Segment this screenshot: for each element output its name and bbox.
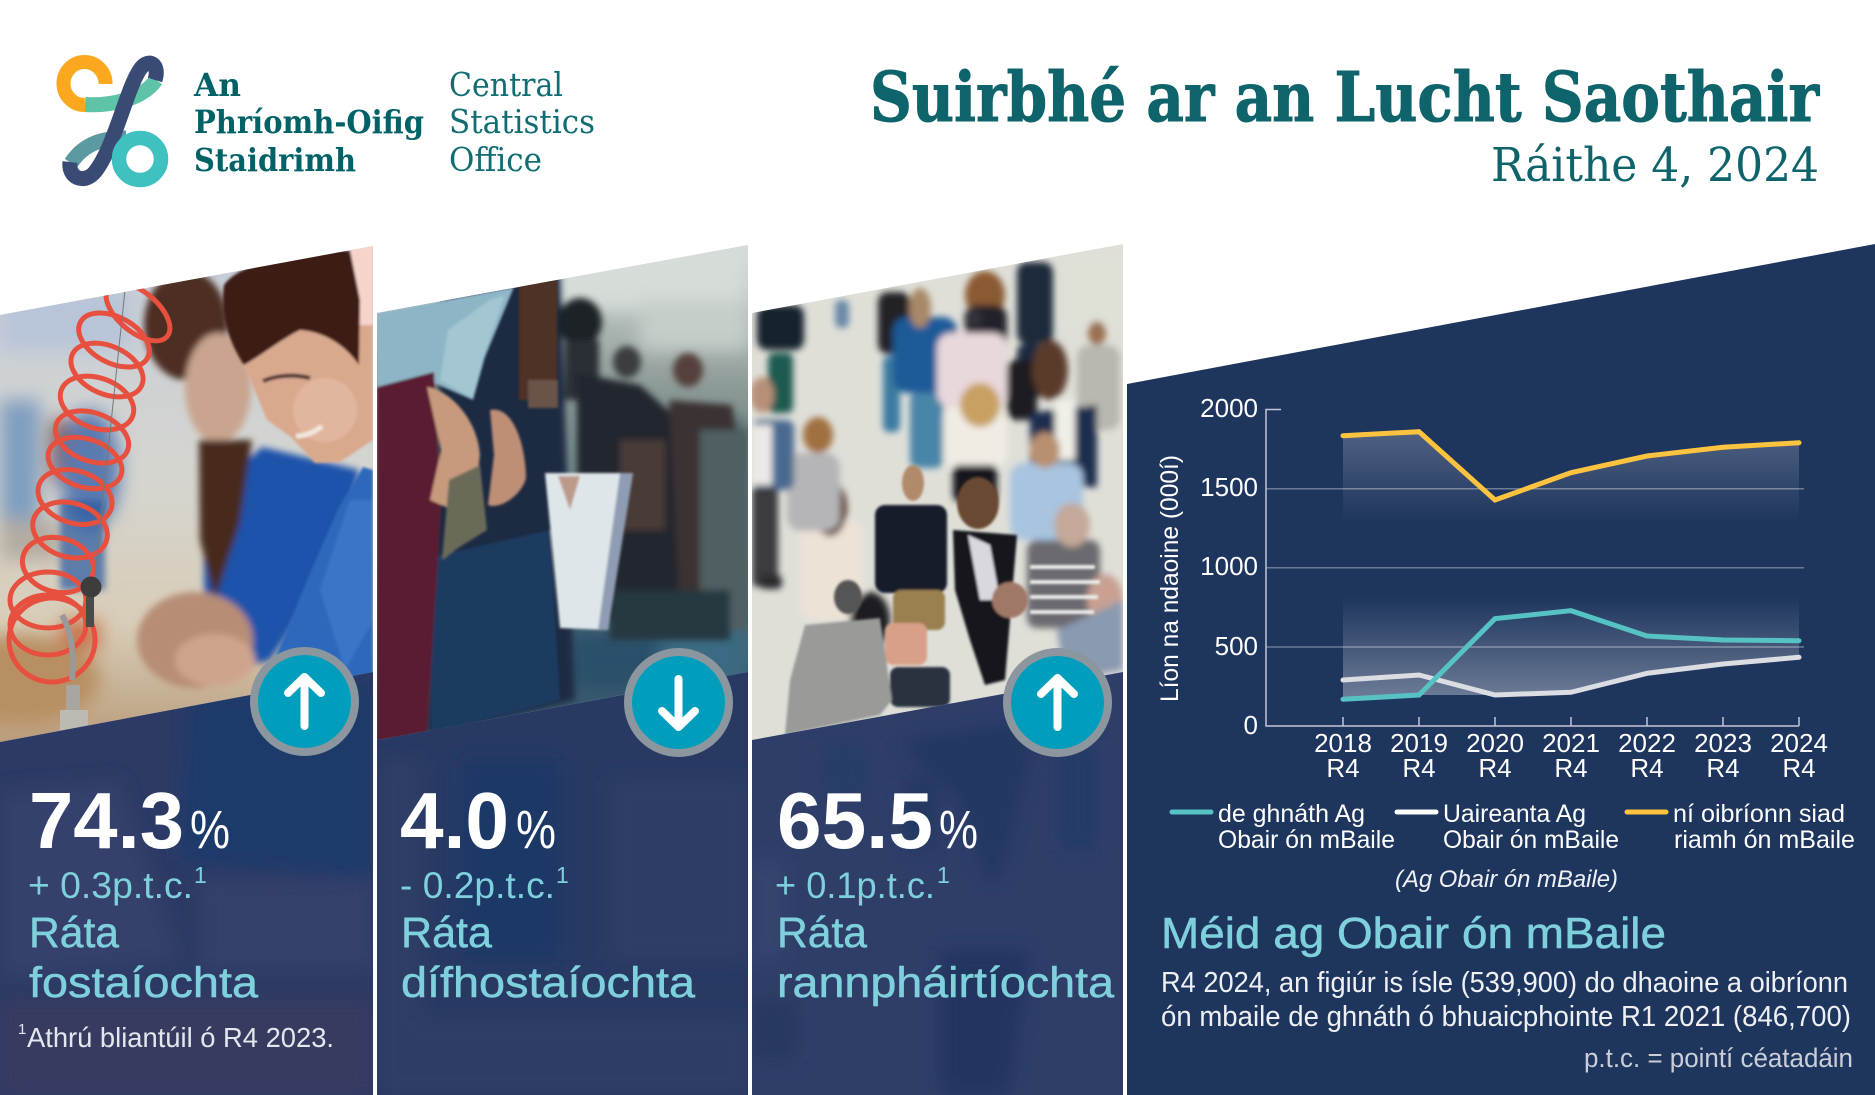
y axis labels: 2000	[1200, 393, 1258, 423]
x axis labels: R4	[1326, 753, 1360, 783]
logo	[64, 62, 595, 180]
legend: never	[1627, 800, 1855, 854]
x axis labels: 2020	[1466, 728, 1524, 758]
stat value: %	[939, 800, 978, 860]
stat change: 1	[194, 862, 207, 888]
footnote: Athrú bliantúil ó R4 2023.	[27, 1022, 334, 1053]
arrow badge: up	[1007, 652, 1108, 753]
footnote: 1	[18, 1021, 26, 1038]
stat label	[401, 909, 695, 1007]
x axis labels: R4	[1782, 753, 1816, 783]
x axis labels: 2023	[1694, 728, 1752, 758]
stat value: 74.3	[29, 776, 184, 865]
stat value: 4.0	[400, 776, 509, 865]
stat change: 1	[556, 862, 569, 888]
logo text: English: Office	[449, 140, 542, 179]
stat change: + 0.3p.t.c.	[28, 865, 193, 906]
stat value: 65.5	[777, 776, 933, 865]
photo: factory worker	[0, 240, 373, 750]
note: p.t.c. = pointí céatadáin	[1584, 1043, 1853, 1073]
y axis labels: 0	[1244, 710, 1258, 740]
panel background	[1127, 244, 1875, 1095]
logo text: English: Central	[449, 65, 563, 104]
x axis labels	[1314, 728, 1828, 783]
y axis labels: 500	[1215, 631, 1258, 661]
axes	[1266, 410, 1799, 726]
series: never	[1343, 432, 1799, 500]
legend: never: ní oibríonn siad	[1673, 800, 1845, 828]
y axis labels	[1200, 393, 1258, 740]
logo text: English	[449, 65, 595, 179]
logo text: Irish: An	[193, 66, 241, 104]
icon: coil fitting	[60, 576, 102, 740]
arrow badge: down	[628, 652, 729, 753]
panel: unemployment rate	[377, 240, 748, 1095]
navy text block background	[752, 660, 1123, 1095]
stat change: 1	[937, 862, 950, 888]
logo text: Irish: Staidrimh	[194, 141, 356, 179]
stat label	[29, 909, 258, 1007]
stat label: Ráta	[401, 909, 492, 957]
logo text: English: Statistics	[449, 102, 595, 141]
stat value: %	[516, 800, 556, 860]
x axis labels: R4	[1402, 753, 1436, 783]
body text	[1161, 967, 1851, 1033]
icon: red air coil	[9, 272, 180, 682]
legend: sometimes: Obair ón mBaile	[1443, 826, 1619, 854]
panel: participation rate	[750, 240, 1123, 1095]
legend: never: riamh ón mBaile	[1674, 826, 1855, 854]
photo: crowd walking	[750, 240, 1123, 750]
stat label: rannpháirtíochta	[777, 959, 1114, 1007]
stat label: Ráta	[777, 909, 867, 957]
line chart	[1156, 393, 1828, 783]
legend: usually: de ghnáth Ag	[1218, 800, 1365, 828]
x axis labels: R4	[1554, 753, 1588, 783]
subtitle: Ráithe 4, 2024	[1491, 138, 1819, 193]
y axis labels: 1500	[1200, 472, 1258, 502]
legend: sometimes: Uaireanta Ag	[1443, 800, 1586, 828]
stat label: Ráta	[29, 909, 119, 957]
y axis labels: 1000	[1200, 551, 1258, 581]
heading: Méid ag Obair ón mBaile	[1161, 909, 1666, 958]
series: usually	[1343, 611, 1799, 699]
navy text block background	[0, 660, 373, 1095]
photo: people with folder	[377, 240, 748, 750]
panel: employment rate	[0, 240, 373, 1095]
body text: ón mbaile de ghnáth ó bhuaicphointe R1 2021 (846,700)	[1161, 1001, 1851, 1033]
stat value: %	[190, 800, 230, 860]
x axis labels: 2022	[1618, 728, 1676, 758]
series: sometimes	[1343, 657, 1799, 695]
stat label: dífhostaíochta	[401, 959, 695, 1007]
stat change: - 0.2p.t.c.	[400, 865, 555, 906]
logo text: Irish	[193, 66, 424, 179]
logo text: Irish: Phríomh-Oifig	[194, 103, 424, 141]
stat label	[777, 909, 1114, 1007]
y axis title: Líon na ndaoine (000í)	[1156, 455, 1184, 702]
legend	[1172, 800, 1855, 854]
legend: usually: Obair ón mBaile	[1218, 826, 1395, 854]
body text: R4 2024, an figiúr is ísle (539,900) do dhaoine a oibríonn	[1161, 967, 1848, 999]
area fills	[1343, 432, 1799, 699]
x axis labels: R4	[1630, 753, 1664, 783]
panel: working from home	[1127, 244, 1875, 1095]
x axis labels: R4	[1706, 753, 1740, 783]
arrow badge: up	[254, 651, 355, 752]
legend: usually	[1172, 800, 1395, 854]
navy text block background	[377, 660, 748, 1095]
x axis labels: 2019	[1390, 728, 1448, 758]
x axis labels: 2024	[1770, 728, 1828, 758]
stat change: + 0.1p.t.c.	[775, 865, 935, 906]
x axis labels: 2021	[1542, 728, 1600, 758]
x axis labels: 2018	[1314, 728, 1372, 758]
stat label: fostaíochta	[29, 959, 258, 1007]
x axis labels: R4	[1478, 753, 1512, 783]
legend caption: (Ag Obair ón mBaile)	[1395, 866, 1618, 893]
icon: CSO knot	[64, 62, 161, 180]
legend: sometimes	[1397, 800, 1619, 854]
